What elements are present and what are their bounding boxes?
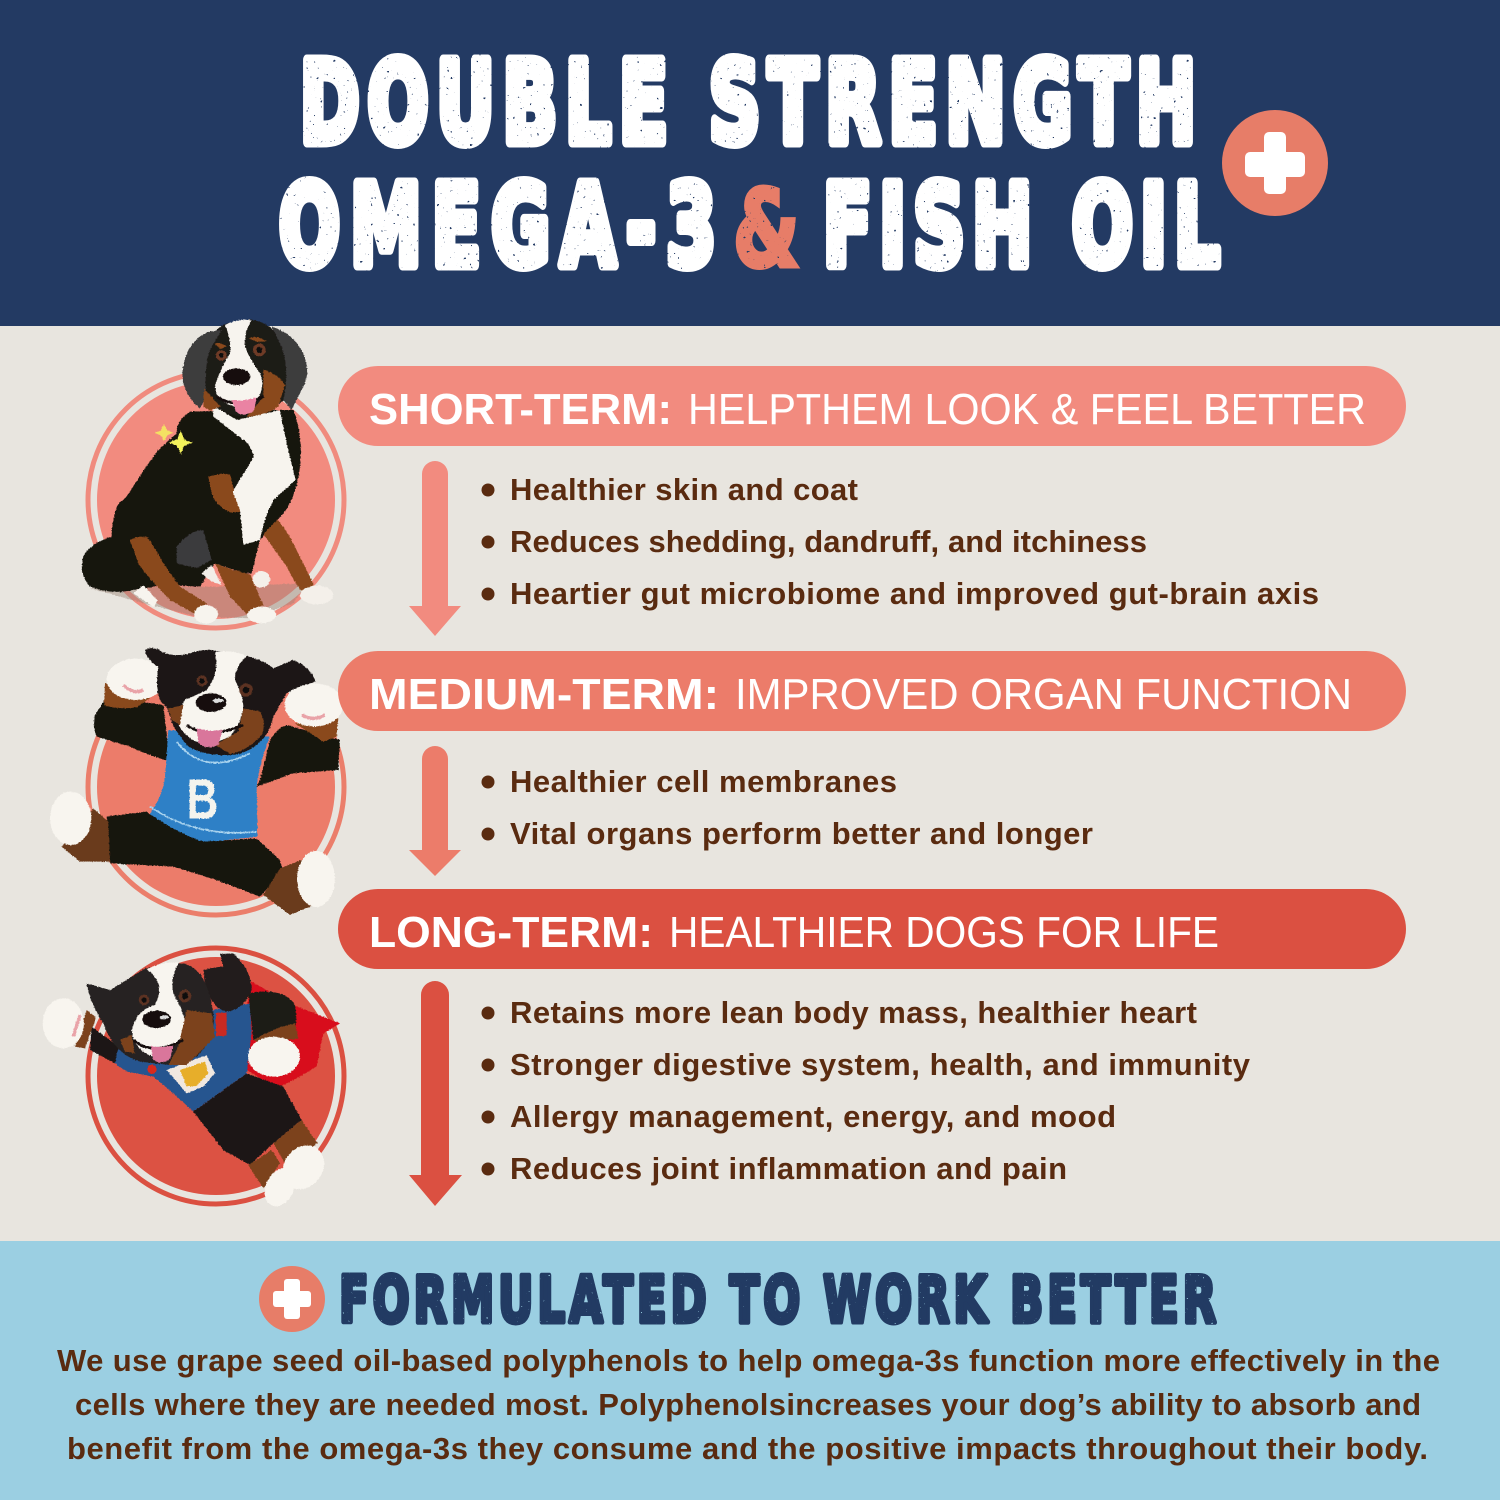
long-term benefits list [482,995,1251,1186]
footer body text: benefit from the omega-3s they consume and the positive impacts throughout their body. [67,1431,1428,1466]
title: DOUBLE STRENGTH [300,40,1196,169]
arrow: short-term [409,461,461,636]
title: & [733,167,800,291]
title: OMEGA-3 [279,163,716,292]
long-term benefits list: Stronger digestive system, health, and immunity [510,1047,1251,1082]
long-term benefits list: Allergy management, energy, and mood [510,1099,1116,1134]
title: FISH OIL [823,163,1220,292]
medium-term benefits list: Vital organs perform better and longer [510,816,1093,851]
illustration: jumping dog: B [187,768,218,831]
short-term benefits list: Healthier skin and coat [510,472,858,507]
long-term heading pill: LONG-TERM: [369,908,653,957]
short-term benefits list: Heartier gut microbiome and improved gut-brain axis [510,576,1319,611]
arrow: long-term [409,981,462,1206]
medium-term heading pill: MEDIUM-TERM: [369,670,719,719]
footer body text [57,1343,1440,1466]
illustration: sitting dog [82,319,333,624]
long-term benefits list: Retains more lean body mass, healthier heart [510,995,1197,1030]
medium-term heading pill [338,651,1406,731]
medium-term benefits list: Healthier cell membranes [510,764,897,799]
short-term heading pill [338,366,1406,446]
medium-term heading pill: IMPROVED ORGAN FUNCTION [735,670,1352,719]
illustration: jumping dog [50,648,343,915]
footer body text: cells where they are needed most. Polyphenolsincreases your dog’s ability to absorb and [75,1387,1421,1422]
icon: plus badge [1222,110,1328,216]
illustration: circle behind flying dog [88,948,344,1204]
panel: short-term [338,366,1406,636]
illustration: circle behind jumping dog [88,659,344,915]
short-term benefits list [482,472,1319,611]
short-term heading pill: SHORT-TERM: [369,385,672,434]
short-term benefits list: Reduces shedding, dandruff, and itchiness [510,524,1147,559]
title [279,40,1220,292]
long-term benefits list: Reduces joint inflammation and pain [510,1151,1067,1186]
panel: long-term [338,889,1406,1206]
panel: medium-term [338,651,1406,876]
footer body text: We use grape seed oil-based polyphenols to help omega-3s function more effectively in the [57,1343,1440,1378]
medium-term benefits list [482,764,1093,851]
header band [0,0,1500,326]
arrow: medium-term [409,746,461,876]
short-term heading pill: HELPTHEM LOOK & FEEL BETTER [688,385,1366,434]
footer heading: FORMULATED TO WORK BETTER [339,1262,1216,1337]
footer panel [0,1241,1500,1500]
long-term heading pill: HEALTHIER DOGS FOR LIFE [669,908,1219,957]
icon: footer plus badge [259,1266,325,1332]
illustration: flying dog [43,953,340,1211]
illustration: circle behind sitting dog [88,372,344,628]
long-term heading pill [338,889,1406,969]
